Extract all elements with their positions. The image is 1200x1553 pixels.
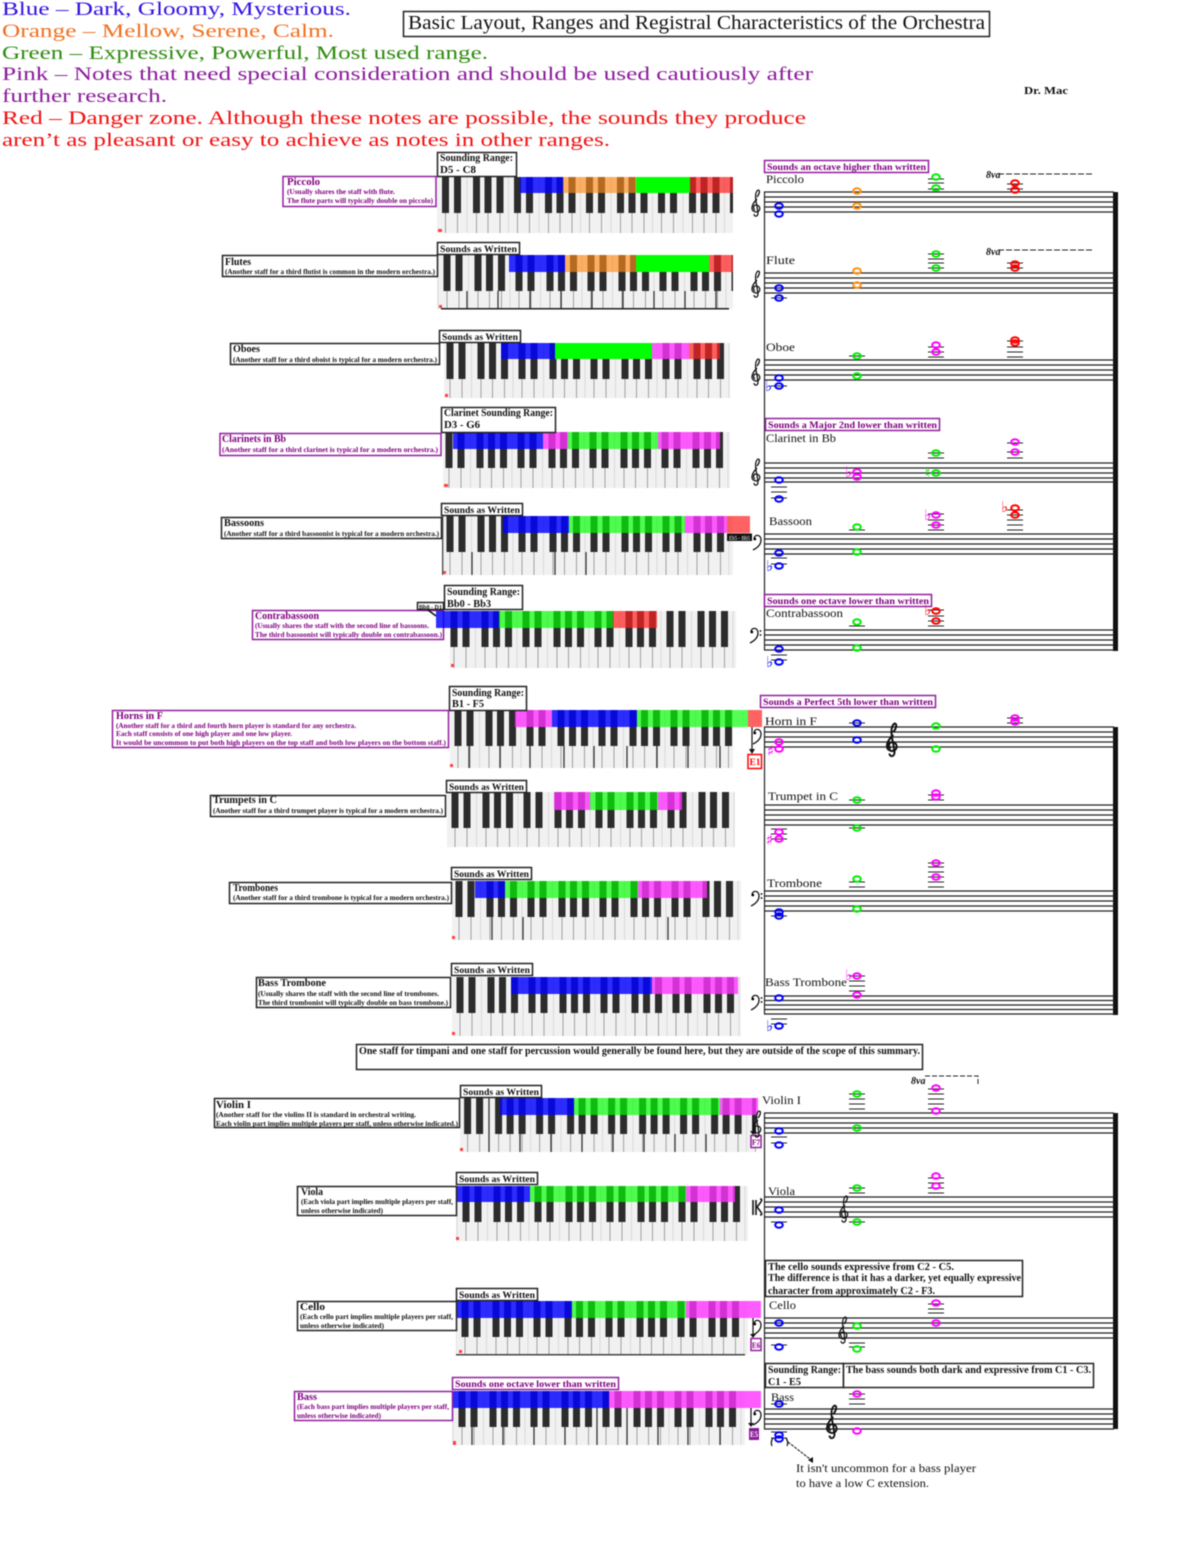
instrument name: Contrabassoon (766, 608, 843, 620)
instrument label: (Another staff for a third clarinet is typical for a modern orchestra.) (222, 446, 439, 454)
icon: sharp: ♯ (766, 831, 773, 849)
legend: red (2, 108, 806, 151)
notes (775, 790, 940, 842)
barline: strings (1113, 1113, 1118, 1429)
percussion note: One staff for timpani and one staff for percussion would generally be found here, but they are outside of the scope of this summary. (359, 1046, 920, 1057)
sounds as written box: Sounds one octave lower than written (455, 1379, 616, 1389)
icon: treble clef (752, 359, 760, 385)
sounds as written box: Sounds as Written (459, 1290, 535, 1300)
keyboard panel: bass trombone (256, 964, 741, 1036)
expressive range note: character from approximately C2 - F3. (768, 1286, 935, 1297)
keyboard panel: piccolo (283, 152, 733, 233)
sounds as written box: Sounds as Written (454, 965, 530, 975)
low C note (796, 1463, 976, 1490)
accidentals: ♭ (924, 601, 931, 619)
instrument label: The third trombonist will typically double on bass trombone.) (258, 999, 449, 1007)
8va bracket (911, 1076, 978, 1087)
notes (775, 860, 940, 919)
sounds as written box: Sounds as Written (440, 244, 517, 254)
8va line (986, 247, 1094, 258)
accidentals: ♭ (845, 966, 852, 984)
icon: treble clef (827, 1406, 837, 1438)
8va line: 8va (986, 247, 1000, 258)
staff: trombone (751, 860, 1114, 919)
staff: flute (752, 247, 1114, 301)
instrument label: Contrabassoon (255, 611, 319, 622)
instrument label: (Another staff for a third bassoonist is typical for a modern orchestra.) (224, 530, 440, 538)
instrument label (252, 610, 444, 640)
sounds as written box: Sounds as Written (442, 332, 518, 342)
note tag with arrow (750, 1115, 761, 1148)
notes (775, 715, 1019, 752)
8va line: 8va (986, 170, 1000, 181)
range box: C1 - E5 (768, 1377, 801, 1388)
ledger lines (771, 1394, 865, 1438)
instrument label: (Each cello part implies multiple players per staff, (300, 1313, 453, 1321)
score frame: brass (764, 727, 766, 1014)
accidentals: ♭ (845, 463, 852, 481)
note tag with arrow: E5 (750, 1430, 758, 1439)
expressive range note: The cello sounds expressive from C2 - C5. (768, 1262, 954, 1273)
expressive range note (766, 1260, 1022, 1297)
instrument label: Cello (300, 1302, 325, 1313)
icon: sharp: ♯ (767, 742, 774, 760)
8va line (986, 170, 1094, 181)
accidentals: ♭ (766, 1017, 773, 1035)
instrument label: (Another staff for a third trumpet player is typical for a modern orchestra.) (213, 807, 444, 815)
sounds as written box: Sounds as Written (449, 782, 524, 792)
keyboard (456, 1301, 761, 1356)
accidentals (766, 966, 852, 1035)
icon: bass clef (750, 628, 761, 643)
instrument label: Bass (297, 1392, 317, 1403)
instrument label: unless otherwise indicated) (297, 1412, 382, 1420)
instrument name: Bassoon (769, 516, 812, 528)
notes (775, 1085, 940, 1148)
legend: green: Green – Expressive, Powerful, Most used range. (2, 43, 488, 64)
icon: bass clef (751, 891, 762, 906)
staff: bass trombone (751, 966, 1114, 1035)
notes (775, 505, 1019, 569)
notes (775, 251, 1019, 301)
notes (775, 608, 940, 665)
instrument label: unless otherwise indicated) (301, 1207, 384, 1215)
instrument label: (Usually shares the staff with flute. (287, 188, 395, 196)
instrument label (222, 518, 442, 538)
icon: bass clef (753, 1410, 761, 1425)
range box (444, 586, 522, 610)
instrument name: Violin I (762, 1095, 801, 1107)
keyboard (436, 611, 736, 668)
notes (775, 1391, 861, 1442)
instrument label (283, 176, 436, 206)
staff: horn (753, 696, 1114, 760)
icon: treble clef (752, 459, 760, 485)
title: Basic Layout, Ranges and Registral Characteristics of the Orchestra (408, 12, 985, 34)
notes (775, 1300, 940, 1352)
low C parentheses (771, 1438, 788, 1446)
instrument label: (Usually shares the staff with the second line of trombones. (258, 990, 439, 998)
notes (775, 1173, 940, 1228)
8va bracket: 8va (911, 1076, 925, 1087)
ledger lines (771, 610, 944, 660)
range box: D3 - G6 (444, 420, 480, 431)
arrow (788, 1442, 813, 1463)
notes (775, 337, 1019, 389)
instrument name: Oboe (766, 342, 795, 354)
ledger lines (771, 795, 944, 839)
keyboard panel: bassoon (222, 504, 752, 575)
instrument label: (Another staff for a third oboist is typical for a modern orchestra.) (233, 356, 438, 364)
range box: Sounding Range: (768, 1365, 841, 1376)
staff: trumpet (764, 790, 1114, 849)
ledger lines (771, 510, 1023, 564)
instrument name: Clarinet in Bb (766, 433, 836, 445)
sounds as written box: Sounds as Written (459, 1174, 535, 1184)
keyboard panel: clarinet (220, 408, 730, 488)
ledger lines (771, 976, 865, 1024)
instrument name: Trombone (767, 878, 822, 890)
score frame: woodwinds (764, 192, 1115, 650)
instrument label (210, 795, 446, 816)
note tag (418, 602, 444, 616)
icon: bass clef (753, 535, 761, 550)
instrument label: Violin I (216, 1100, 251, 1111)
icon: bass clef (751, 995, 762, 1010)
range box (438, 152, 516, 176)
note tag: Eb5 - Bb5 (729, 535, 750, 542)
expressive range note: The difference is that it has a darker, yet equally expressive (768, 1273, 1021, 1284)
ledger lines (928, 179, 1023, 189)
legend: red: aren’t as pleasant or easy to achieve as notes in other ranges. (2, 130, 610, 151)
instrument name: Flute (766, 255, 795, 267)
transposition note: Sounds a Perfect 5th lower than written (763, 697, 933, 707)
instrument label (214, 1098, 460, 1128)
keyboard (444, 343, 730, 398)
range box: Sounding Range: (447, 587, 520, 598)
legend: pink (2, 64, 814, 107)
instrument label: Bassoons (224, 518, 264, 529)
instrument label: Bass Trombone (258, 978, 326, 989)
keyboard panel: contrabassoon (252, 586, 736, 668)
instrument label: (Another staff for a third and fourth horn player is standard for any orchestra. (116, 722, 356, 730)
sounds as written box: Sounds as Written (454, 869, 529, 879)
colour legend (2, 0, 814, 151)
staff: piccolo (752, 160, 1114, 217)
instrument label (230, 344, 440, 364)
instrument name: Viola (768, 1186, 795, 1198)
range box: Sounding Range: (440, 153, 513, 164)
ledger lines (771, 443, 1023, 498)
instrument label: Each staff consists of one high player and one low player. (116, 730, 292, 738)
low C note: to have a low C extension. (796, 1478, 929, 1490)
instrument label: Horns in F (116, 711, 163, 722)
instrument label: Flutes (225, 257, 251, 268)
instrument label (298, 1186, 456, 1216)
icon: treble clef (887, 724, 897, 756)
accidentals: ♭ (1001, 498, 1008, 516)
keyboard (442, 516, 750, 575)
instrument label (222, 256, 438, 276)
accidentals: ♭ (766, 557, 773, 575)
range box (766, 1364, 844, 1388)
range box (442, 408, 556, 432)
accidentals (766, 498, 1008, 575)
keyboard (437, 177, 733, 233)
legend: red: Red – Danger zone. Although these notes are possible, the sounds they produce (2, 108, 806, 129)
instrument label: (Each viola part implies multiple players per staff, (301, 1198, 453, 1206)
keyboard (437, 255, 733, 310)
low C note: It isn't uncommon for a bass player (796, 1463, 976, 1475)
barline: woodwinds (1113, 192, 1118, 651)
instrument name: Cello (769, 1300, 796, 1312)
instrument name: Bass Trombone (765, 977, 847, 989)
keyboard panel: cello (298, 1288, 761, 1356)
accidentals: ♭ (924, 506, 931, 524)
icon: treble clef (839, 1317, 847, 1343)
icon: bass clef (753, 729, 761, 744)
keyboard panel: trumpet (210, 780, 735, 847)
instrument label (294, 1392, 452, 1420)
accidentals: ♮ (925, 464, 930, 482)
legend: pink: further research. (2, 86, 167, 107)
expressive range note (844, 1364, 1094, 1388)
ledger lines (849, 718, 1023, 723)
keyboard panel: violin (214, 1086, 761, 1152)
instrument label: Piccolo (287, 177, 320, 188)
instrument label: unless otherwise indicated) (300, 1322, 385, 1330)
ledger lines (771, 254, 1023, 298)
instrument label: The flute parts will typically double on piccolo) (287, 197, 434, 205)
staff: clarinet (752, 418, 1114, 502)
instrument label: Trumpets in C (213, 795, 277, 806)
range box: Clarinet Sounding Range: (444, 408, 553, 419)
ledger lines (771, 1089, 944, 1143)
instrument label: Clarinets in Bb (222, 434, 286, 445)
ledger lines (771, 1304, 944, 1347)
instrument label (230, 882, 452, 904)
instrument name: Horn in F (765, 716, 817, 728)
range box: D5 - C8 (440, 165, 476, 176)
keyboard (460, 1098, 758, 1152)
staff: bassoon (753, 498, 1114, 575)
notes (775, 973, 861, 1029)
ledger lines (771, 863, 944, 916)
ledger lines (771, 1178, 944, 1222)
instrument label: It would be uncommon to put both high players on the top staff and both low players on the bottom staff.) (116, 739, 447, 747)
instrument label (220, 434, 441, 456)
instrument label: (Another staff for the violins II is standard in orchestral writing. (216, 1111, 416, 1119)
icon: treble clef (840, 1196, 848, 1222)
keyboard (452, 977, 741, 1036)
instrument name: Piccolo (766, 174, 804, 186)
keyboard panel: horn (112, 686, 762, 768)
keyboard panel: trombone (230, 868, 741, 940)
instrument label: (Usually shares the staff with the second line of bassoons. (255, 622, 429, 630)
legend: pink: Pink – Notes that need special consideration and should be used cautiously after (2, 64, 814, 85)
range box: Sounding Range: (452, 688, 524, 699)
note tag (727, 534, 752, 542)
notes (775, 174, 1019, 217)
keyboard panel: bass (294, 1378, 761, 1445)
barline: brass (1113, 727, 1118, 1015)
instrument label: Trombones (233, 883, 278, 894)
staff: cello (753, 1260, 1114, 1352)
staff: bass (753, 1364, 1114, 1490)
transposition note: Sounds an octave higher than written (767, 162, 926, 172)
sounds as written box: Sounds as Written (463, 1087, 539, 1097)
icon: flat: ♭ (765, 377, 772, 395)
instrument label: The third bassoonist will typically double on contrabassoon.) (255, 631, 443, 639)
icon: bass clef (753, 1320, 761, 1335)
percussion note (356, 1044, 922, 1070)
instrument label (256, 978, 450, 1008)
keyboard (452, 881, 741, 940)
instrument label: (Each bass part implies multiple players per staff, (297, 1403, 449, 1411)
instrument label: Oboes (233, 344, 260, 355)
note tag with arrow (748, 1408, 759, 1440)
note tag with arrow (750, 1318, 761, 1350)
staff: oboe (752, 337, 1114, 395)
icon: treble clef (752, 190, 760, 216)
instrument label: (Another staff for a third flutist is common in the modern orchestra.) (225, 268, 436, 276)
icon: treble clef (752, 271, 760, 297)
score frame: strings (764, 1113, 766, 1429)
range box (450, 686, 526, 710)
accidentals: ♭ (766, 653, 773, 671)
keyboard (452, 1391, 761, 1445)
keyboard (450, 710, 762, 768)
keyboard (443, 432, 730, 488)
icon: alto clef (753, 1199, 762, 1215)
accidentals (766, 601, 931, 671)
instrument label (112, 710, 448, 748)
range box: B1 - F5 (452, 699, 484, 710)
icon: treble clef (753, 1111, 761, 1137)
accidentals (845, 463, 930, 482)
keyboard panel: flute (222, 242, 733, 310)
note tag with arrow: F7 (752, 1138, 760, 1147)
note tag: Bb0 - D1 (419, 604, 442, 611)
sounds as written box: Sounds as Written (444, 505, 520, 515)
staff: violin (753, 1076, 1114, 1148)
instrument name: Bass (771, 1392, 795, 1404)
range box: Bb0 - Bb3 (447, 599, 491, 610)
keyboard panel: viola (298, 1172, 748, 1241)
staff: contrabassoon (750, 594, 1114, 671)
expressive range note: The bass sounds both dark and expressive from C1 - C3. (846, 1365, 1091, 1376)
instrument label (298, 1302, 456, 1330)
instrument label: (Another staff for a third trombone is typical for a modern orchestra.) (233, 894, 450, 902)
legend: orange: Orange – Mellow, Serene, Calm. (2, 21, 334, 42)
staff: viola (753, 1173, 1114, 1228)
instrument name: Trumpet in C (768, 791, 838, 803)
keyboard (456, 1186, 748, 1241)
note tag with arrow (748, 727, 762, 768)
transposition note: Sounds a Major 2nd lower than written (768, 420, 937, 430)
notes (775, 439, 1019, 502)
note tag with arrow: E1 (750, 757, 761, 767)
keyboard panel: oboe (230, 330, 730, 398)
instrument label: Each violin part implies multiple players per staff, unless otherwise indicated.) (216, 1120, 459, 1128)
instrument label: Viola (301, 1187, 324, 1198)
keyboard (447, 792, 735, 847)
transposition note: Sounds one octave lower than written (767, 596, 929, 606)
author: Dr. Mac (1024, 85, 1068, 97)
ledger lines (771, 341, 1023, 386)
note tag with arrow: E6 (752, 1341, 760, 1350)
